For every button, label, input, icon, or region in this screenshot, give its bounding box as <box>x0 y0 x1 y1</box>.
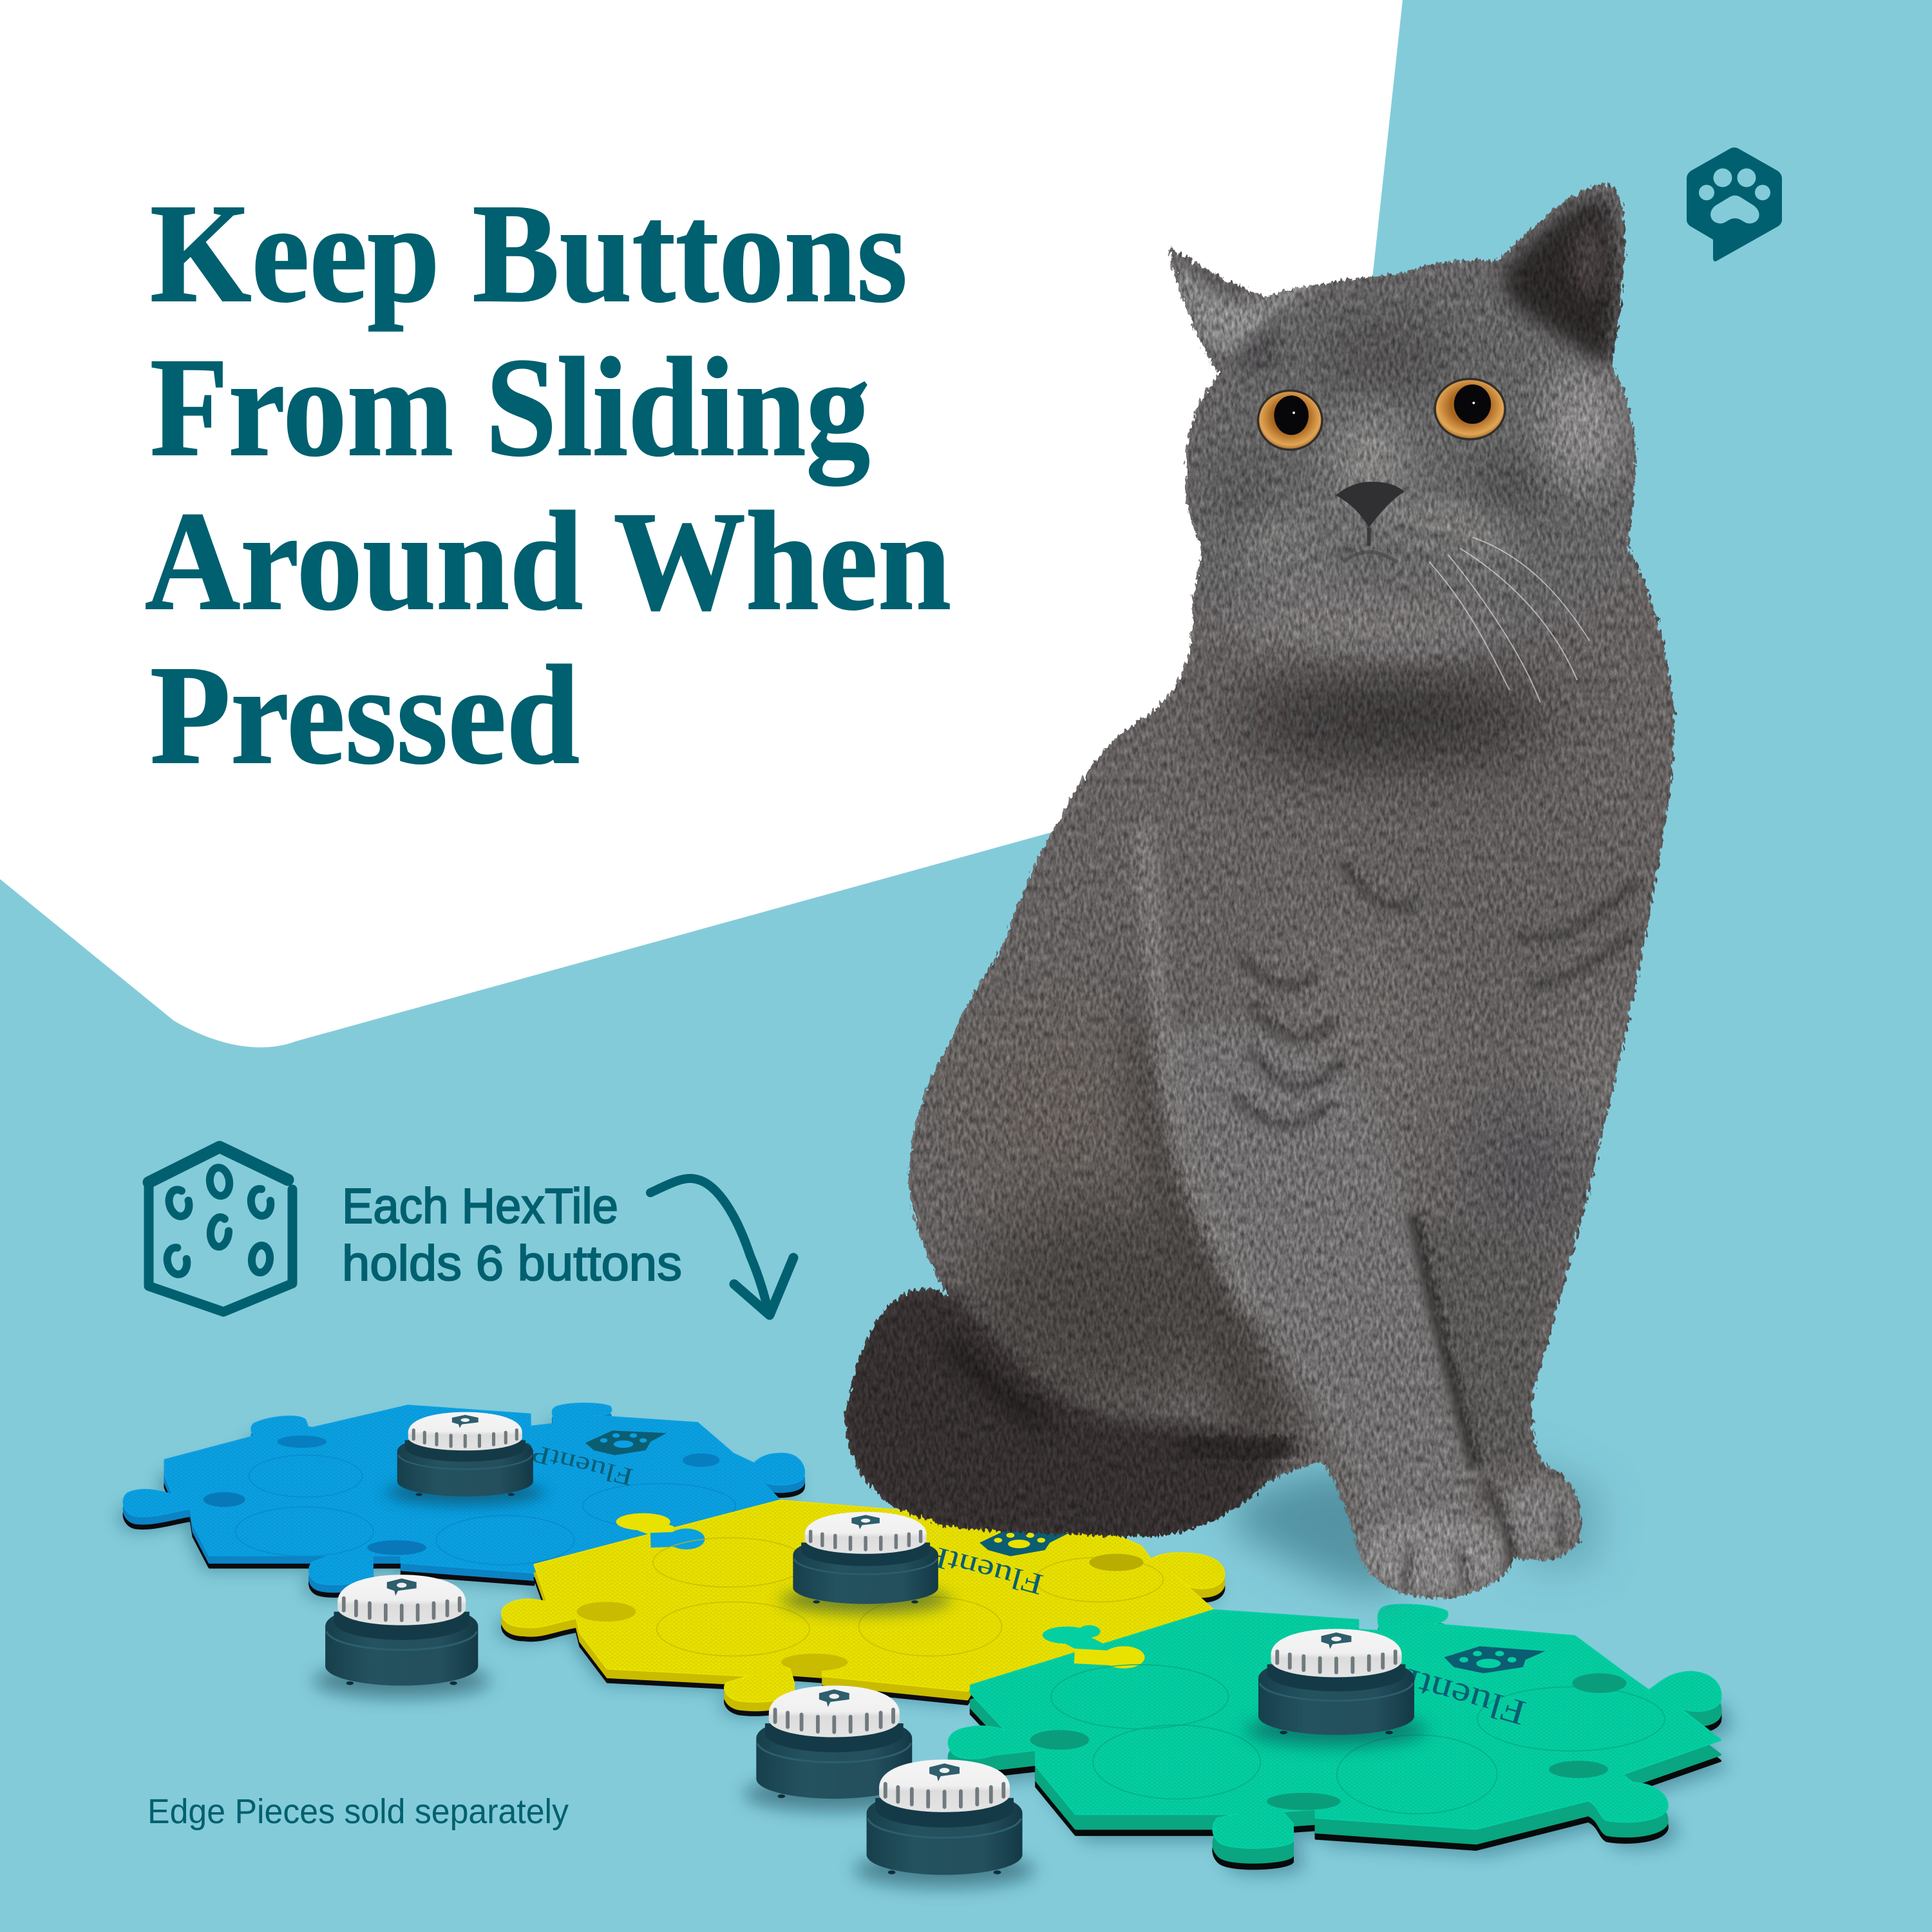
yellow HexTile <box>502 1501 1224 1715</box>
title: Around When <box>145 482 951 639</box>
loose button left <box>313 1575 491 1698</box>
button on green tile <box>1245 1629 1427 1747</box>
icon: hand-drawn HexTile with six button rings <box>149 1147 292 1312</box>
yellow tile wordmark: FluentPet <box>896 1531 1046 1602</box>
right ear dark <box>1503 197 1617 365</box>
blue HexTile <box>124 1404 804 1596</box>
loose button middle <box>744 1685 925 1812</box>
muzzle whisker rows <box>1275 530 1472 573</box>
green tile FluentPet logo <box>1444 1646 1545 1673</box>
title: From Sliding <box>150 328 870 486</box>
main foreleg <box>1164 1025 1475 1565</box>
text: each HexTile holds 6 buttons: Each HexTile <box>342 1179 618 1234</box>
title <box>145 175 951 793</box>
blue tile wordmark: FluentPet <box>505 1434 636 1492</box>
chest ripples <box>1232 862 1639 1126</box>
dark line between forelegs <box>1415 1214 1476 1466</box>
face highlights <box>1217 313 1623 649</box>
yellow tile FluentPet logo <box>980 1529 1070 1557</box>
button on yellow tile <box>781 1512 950 1614</box>
cat nose and mouth <box>1336 482 1405 562</box>
loose button front <box>854 1759 1035 1888</box>
paws <box>1361 1514 1510 1596</box>
blue tile FluentPet logo <box>585 1430 667 1455</box>
green tile wordmark: FluentPet <box>1360 1649 1530 1733</box>
title: Keep Buttons <box>150 175 907 332</box>
text: each HexTile holds 6 buttons <box>342 1179 682 1291</box>
icon: FluentPet paw speech-bubble logo <box>1687 147 1782 261</box>
interlocking bones green and yellow <box>1043 1625 1144 1669</box>
text: edge pieces note: Edge Pieces sold separately <box>147 1792 569 1831</box>
interlocking bones blue and yellow <box>616 1513 705 1549</box>
cat fur body <box>844 182 1677 1601</box>
second foreleg <box>1428 1226 1556 1470</box>
foreleg highlight <box>1144 823 1253 1312</box>
tile shadows <box>119 1419 1730 1875</box>
cat whiskers <box>1429 537 1589 703</box>
panel: white headline shape <box>0 0 1403 1047</box>
arrow: curved pointing to tiles <box>650 1179 793 1315</box>
cat left eye <box>1258 391 1322 450</box>
head <box>1170 184 1638 656</box>
button on blue tile <box>386 1412 544 1506</box>
text: each HexTile holds 6 buttons: holds 6 buttons <box>342 1236 682 1291</box>
shadow on haunch beside foreleg <box>1128 936 1306 1454</box>
cat <box>844 182 1677 1601</box>
green HexTile <box>949 1605 1721 1868</box>
body shading <box>961 676 1651 1417</box>
cat floor shadow <box>1232 1454 1602 1592</box>
left ear light <box>1177 261 1269 357</box>
title: Pressed <box>150 636 580 793</box>
tail <box>835 1285 1282 1553</box>
cat right eye <box>1435 379 1505 439</box>
